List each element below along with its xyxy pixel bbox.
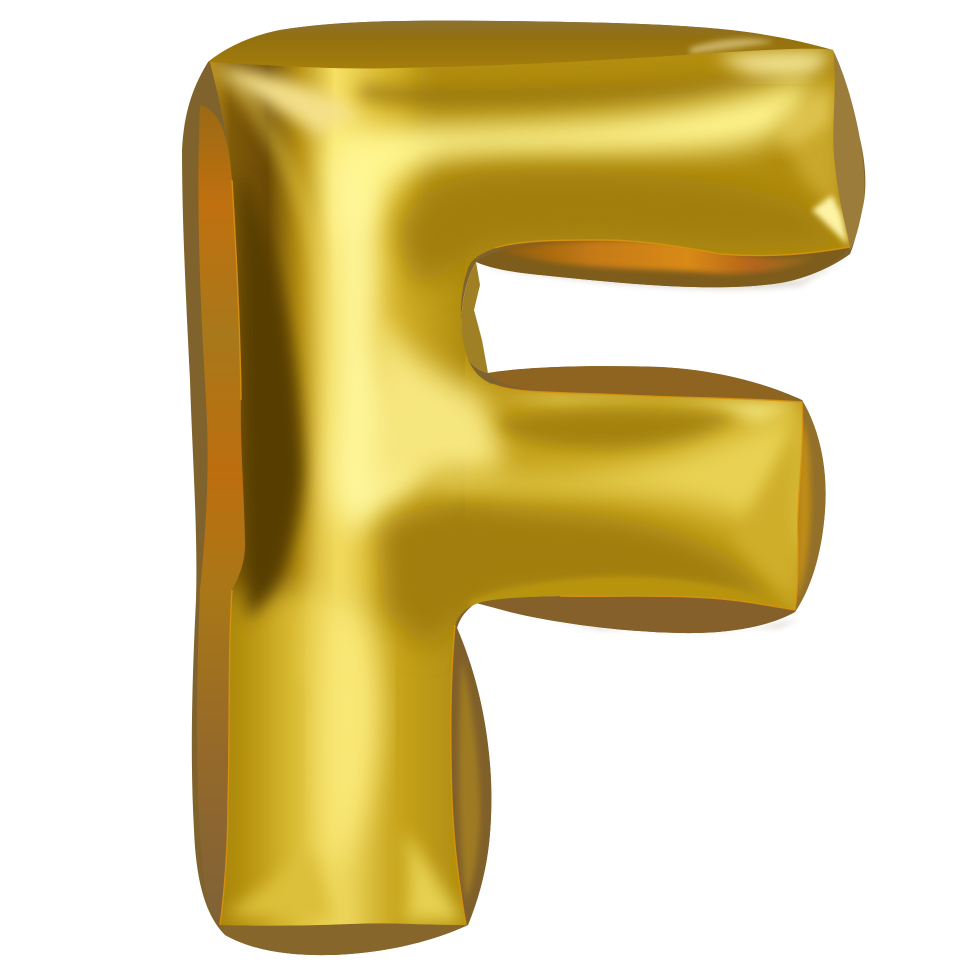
left side gusset bbox=[197, 105, 245, 925]
balloon outer silhouette bbox=[182, 21, 865, 955]
right corner shine bbox=[787, 80, 840, 202]
stem shading bbox=[210, 62, 465, 606]
bright band under top edge of middle arm bbox=[480, 395, 800, 425]
inner notch fold bbox=[461, 262, 488, 373]
top gusset band bbox=[208, 21, 833, 70]
right gusset of stem bbox=[451, 628, 491, 925]
dark saddle of top arm bbox=[398, 172, 845, 290]
front face of the letter bbox=[210, 48, 850, 926]
stem bottom left shine bbox=[225, 850, 335, 920]
waist glow bbox=[364, 314, 518, 494]
main bright band of top arm bbox=[330, 76, 812, 240]
lower stem glow bbox=[322, 600, 378, 870]
underside of top arm bbox=[476, 240, 850, 287]
middle arm soft base bbox=[481, 414, 796, 609]
thin orange seam lines bbox=[220, 180, 850, 925]
soft shadow edge of balloon bbox=[480, 256, 850, 632]
lower stem shading bbox=[221, 576, 476, 926]
top arm soft base shading bbox=[410, 50, 843, 214]
dark lower saddle of middle arm bbox=[378, 506, 790, 650]
right gusset of middle arm bbox=[795, 400, 826, 612]
gold foil balloon letter F bbox=[182, 20, 866, 956]
underside orange reflection bbox=[498, 240, 815, 273]
top edge highlights bbox=[215, 66, 360, 135]
stem bottom corner shine bbox=[405, 830, 462, 922]
central vertical highlight bbox=[330, 150, 425, 531]
light streak beside left edge bbox=[220, 74, 338, 574]
right shine of middle arm bbox=[740, 433, 798, 593]
underside of middle arm bbox=[476, 596, 795, 633]
top gusset highlight bbox=[690, 39, 775, 54]
bottom gusset bbox=[220, 923, 468, 955]
light band of middle arm bbox=[430, 408, 800, 560]
dark reflection in middle arm bbox=[498, 410, 735, 449]
top of middle arm bbox=[488, 366, 802, 402]
face base colour bbox=[200, 40, 880, 940]
right gusset bbox=[833, 50, 865, 250]
dark vertical fold bbox=[240, 170, 304, 620]
